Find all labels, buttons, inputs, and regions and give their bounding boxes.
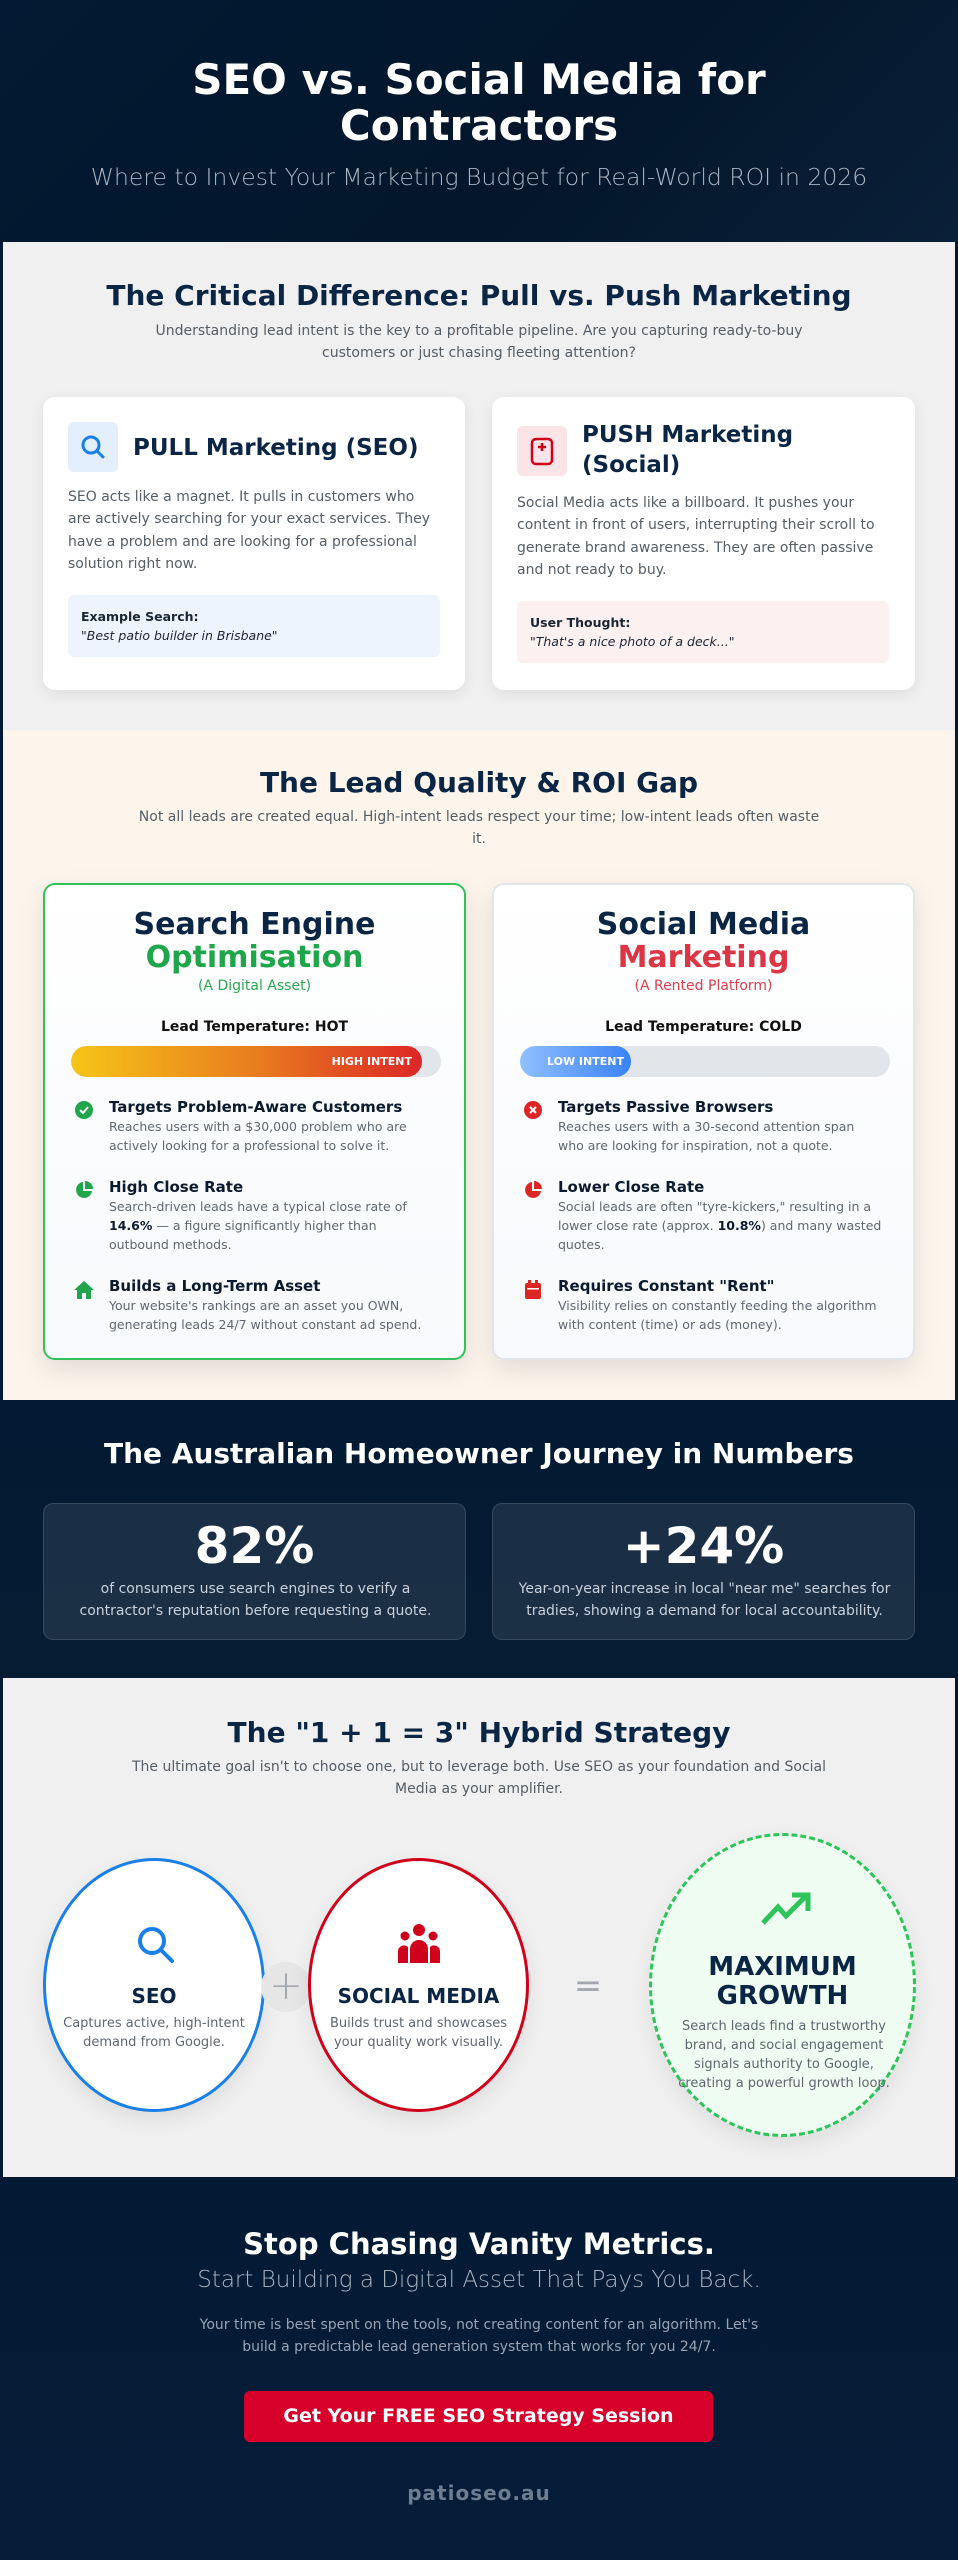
item: problem-aware	[75, 1098, 407, 1153]
icon: magnifier	[68, 422, 118, 472]
item: long-term asset: generating leads 24/7 without constant ad spend.	[109, 1317, 421, 1332]
item: lower close rate: Social leads are often "tyre-kickers," resulting in a	[558, 1199, 871, 1214]
panel: stats	[0, 1400, 958, 1678]
card body: generate brand awareness. They are often passive	[517, 540, 873, 556]
card body: have a problem and are looking for a professional	[68, 534, 417, 550]
item: passive browsers: Targets Passive Browsers	[558, 1098, 773, 1116]
title: Social Media	[597, 907, 810, 942]
icon: equals: =	[574, 1966, 602, 2006]
title: Marketing	[618, 940, 789, 975]
brand: patioseo.au	[407, 2481, 551, 2505]
title	[134, 907, 375, 975]
stat: 82%: 82%	[195, 1517, 314, 1575]
example search box: Example Search:	[81, 609, 199, 624]
stat: +24%: +24%	[623, 1517, 784, 1575]
item: close rate: 14.6% — a figure significantly higher than	[109, 1218, 377, 1233]
item: constant rent: Visibility relies on constantly feeding the algorithm	[558, 1298, 877, 1313]
item: problem-aware: Reaches users with a $30,000 problem who are	[109, 1119, 407, 1134]
icon: plus	[261, 1962, 311, 2012]
temperature label: Lead Temperature: HOT	[161, 1019, 348, 1035]
user thought box: User Thought:	[530, 615, 630, 630]
bar: low intent: LOW INTENT	[547, 1055, 624, 1068]
card: push marketing	[492, 397, 915, 690]
label: MAXIMUM	[708, 1952, 857, 1982]
button	[244, 2391, 713, 2442]
item: close rate	[76, 1178, 407, 1252]
card body: Social Media acts like a billboard. It pushes your	[517, 495, 854, 511]
item: close rate: outbound methods.	[109, 1237, 232, 1252]
item: close rate: High Close Rate	[109, 1178, 243, 1196]
card body: content in front of users, interrupting their scroll to	[517, 517, 875, 533]
header	[0, 0, 958, 242]
item: problem-aware: actively looking for a professional to solve it.	[109, 1138, 389, 1153]
icon: people	[398, 1924, 440, 1963]
icon: plus: +	[269, 1963, 303, 2009]
card body	[68, 489, 430, 572]
item: lower close rate: quotes.	[558, 1237, 605, 1252]
panel: hybrid strategy	[3, 1678, 955, 2177]
circle: social media	[308, 1858, 529, 2112]
stat: 82%	[43, 1503, 466, 1640]
card body: are actively searching for your exact services. They	[68, 511, 430, 527]
example search box: "Best patio builder in Brisbane"	[81, 628, 278, 643]
icon: magnifier	[138, 1927, 174, 1964]
desc: Captures active, high-intent demand from Google.	[63, 2016, 245, 2050]
intro text: The ultimate goal isn't to choose one, but to leverage both. Use SEO as your foundation and Social Media as your amplifier.	[132, 1759, 826, 1797]
card: SEO lead quality	[43, 883, 466, 1360]
label	[708, 1952, 857, 2011]
label: SEO	[131, 1984, 177, 2008]
icon: social post	[517, 426, 567, 476]
user thought box: "That's a nice photo of a deck..."	[530, 634, 734, 649]
stat: +24%	[492, 1503, 915, 1640]
item: long-term asset	[74, 1277, 421, 1332]
heading: australian homeowner journey: The Australian Homeowner Journey in Numbers	[104, 1437, 854, 1470]
card title: (Social)	[582, 452, 680, 478]
card title	[582, 422, 793, 478]
card body	[517, 495, 875, 578]
title: Optimisation	[146, 940, 363, 975]
stat: 82%: of consumers use search engines to verify a contractor's reputation before requesting a quote.	[80, 1581, 431, 1619]
subtitle: (A Rented Platform)	[634, 978, 773, 994]
subheadline: Start Building a Digital Asset That Pays You Back.	[197, 2267, 761, 2293]
item: passive browsers: who are looking for inspiration, not a quote.	[558, 1138, 833, 1153]
item: constant rent	[525, 1277, 877, 1332]
text: Your time is best spent on the tools, not creating content for an algorithm. Let's build a predictable lead generation system that works for you 24/7.	[200, 2317, 758, 2355]
title: Search Engine	[134, 907, 375, 942]
subtitle: (A Digital Asset)	[198, 978, 311, 994]
item: lower close rate	[525, 1178, 881, 1252]
card: social lead quality	[492, 883, 915, 1360]
headline: Stop Chasing Vanity Metrics.	[243, 2227, 715, 2261]
temperature label: Lead Temperature: COLD	[605, 1019, 802, 1035]
bar: low intent	[520, 1046, 890, 1077]
button: Get Your FREE SEO Strategy Session	[283, 2405, 674, 2427]
item: passive browsers	[524, 1098, 854, 1153]
stat: +24%: Year-on-year increase in local "near me" searches for tradies, showing a demand for local accountability.	[519, 1581, 890, 1619]
card body: solution right now.	[68, 556, 197, 572]
panel: footer cta	[0, 2177, 958, 2560]
circle: maximum growth	[649, 1833, 916, 2137]
item: constant rent: Requires Constant "Rent"	[558, 1277, 774, 1295]
card title: PULL Marketing (SEO)	[133, 435, 418, 461]
card: pull marketing	[43, 397, 465, 690]
intro text: Not all leads are created equal. High-intent leads respect your time; low-intent leads often waste it.	[139, 809, 819, 847]
title	[597, 907, 810, 975]
panel: lead quality	[3, 730, 955, 1400]
heading: lead quality: The Lead Quality & ROI Gap	[260, 766, 698, 799]
circle: SEO	[43, 1858, 265, 2112]
label: SOCIAL MEDIA	[338, 1984, 499, 2008]
card body: and not ready to buy.	[517, 562, 666, 578]
item: problem-aware: Targets Problem-Aware Customers	[109, 1098, 402, 1116]
bar: high intent: HIGH INTENT	[332, 1055, 412, 1068]
title: SEO vs. Social Media for	[192, 55, 766, 104]
subtitle: Where to Invest Your Marketing Budget for Real-World ROI in 2026	[91, 163, 867, 191]
item: close rate: Search-driven leads have a typical close rate of	[109, 1199, 407, 1214]
card body: SEO acts like a magnet. It pulls in customers who	[68, 489, 414, 505]
heading: critical difference: The Critical Difference: Pull vs. Push Marketing	[106, 279, 852, 312]
desc: Builds trust and showcases your quality work visually.	[330, 2016, 507, 2050]
card title: PUSH Marketing	[582, 422, 793, 448]
title	[192, 55, 766, 150]
item: lower close rate: lower close rate (approx. 10.8%) and many wasted	[558, 1218, 881, 1233]
panel: pull vs push	[3, 242, 955, 730]
item: lower close rate: Lower Close Rate	[558, 1178, 704, 1196]
icon: trending up	[761, 1892, 810, 1925]
intro text: Understanding lead intent is the key to a profitable pipeline. Are you capturing ready-to-buy customers or just chasing fleeting attention?	[156, 323, 802, 361]
user thought box	[517, 601, 889, 663]
bar: high intent	[71, 1046, 441, 1077]
heading: hybrid strategy: The "1 + 1 = 3" Hybrid Strategy	[228, 1716, 730, 1749]
item: long-term asset: Your website's rankings are an asset you OWN,	[109, 1298, 403, 1313]
item: long-term asset: Builds a Long-Term Asset	[109, 1277, 320, 1295]
label: GROWTH	[717, 1981, 848, 2011]
desc: Search leads find a trustworthy brand, and social engagement signals authority to Google, creating a powerful growth loop.	[678, 2019, 890, 2091]
item: passive browsers: Reaches users with a 30-second attention span	[558, 1119, 854, 1134]
item: constant rent: with content (time) or ads (money).	[558, 1317, 782, 1332]
example search box	[68, 595, 440, 657]
title: Contractors	[340, 101, 618, 150]
